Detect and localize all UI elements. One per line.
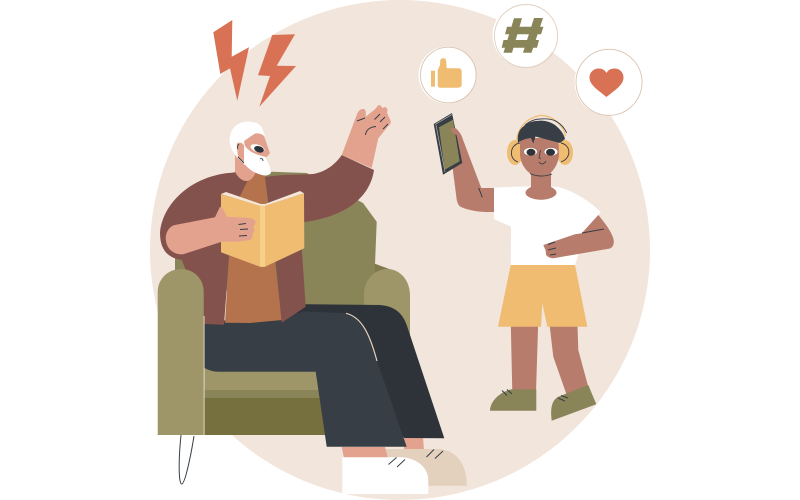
hash symbol [502, 18, 544, 53]
forearm [543, 215, 614, 258]
right shoe [551, 385, 596, 421]
hair [518, 121, 565, 144]
trouser crease [346, 313, 377, 361]
icon: lightning bolts [213, 20, 296, 107]
child [434, 113, 614, 421]
legs [511, 320, 538, 392]
eyes [524, 148, 537, 156]
icon: heart bubble [574, 48, 642, 116]
earmuffs [507, 140, 523, 165]
neck [235, 150, 255, 181]
headband [517, 115, 566, 140]
background circle [150, 0, 650, 500]
shirt [225, 172, 282, 323]
icon: like bubble [418, 46, 476, 104]
neck [526, 170, 556, 200]
hair [230, 122, 265, 165]
finger lines [357, 114, 388, 135]
back ankle and shoe [384, 436, 467, 486]
heart [590, 68, 624, 97]
front ankle and shoe [342, 447, 428, 494]
shorts [498, 265, 587, 327]
ear [237, 143, 244, 162]
beard [242, 146, 271, 175]
old man [160, 105, 467, 494]
trousers: front leg [204, 312, 407, 447]
left armchair arm [158, 269, 204, 435]
raised arm [451, 128, 500, 212]
face [520, 138, 559, 177]
eye [250, 143, 265, 154]
raised forearm and hand [342, 105, 391, 168]
left shoe [490, 389, 536, 411]
phone [434, 113, 462, 175]
face [244, 133, 270, 157]
armchair back and seat [175, 172, 410, 484]
trousers: back leg [285, 304, 444, 438]
book [221, 191, 304, 267]
icon: hashtag bubble [492, 3, 558, 68]
arm and hand holding book [166, 207, 256, 254]
finger lines [238, 224, 248, 236]
t-shirt [494, 186, 601, 265]
jacket and raised arm [160, 172, 252, 325]
thumbs up [431, 58, 462, 88]
